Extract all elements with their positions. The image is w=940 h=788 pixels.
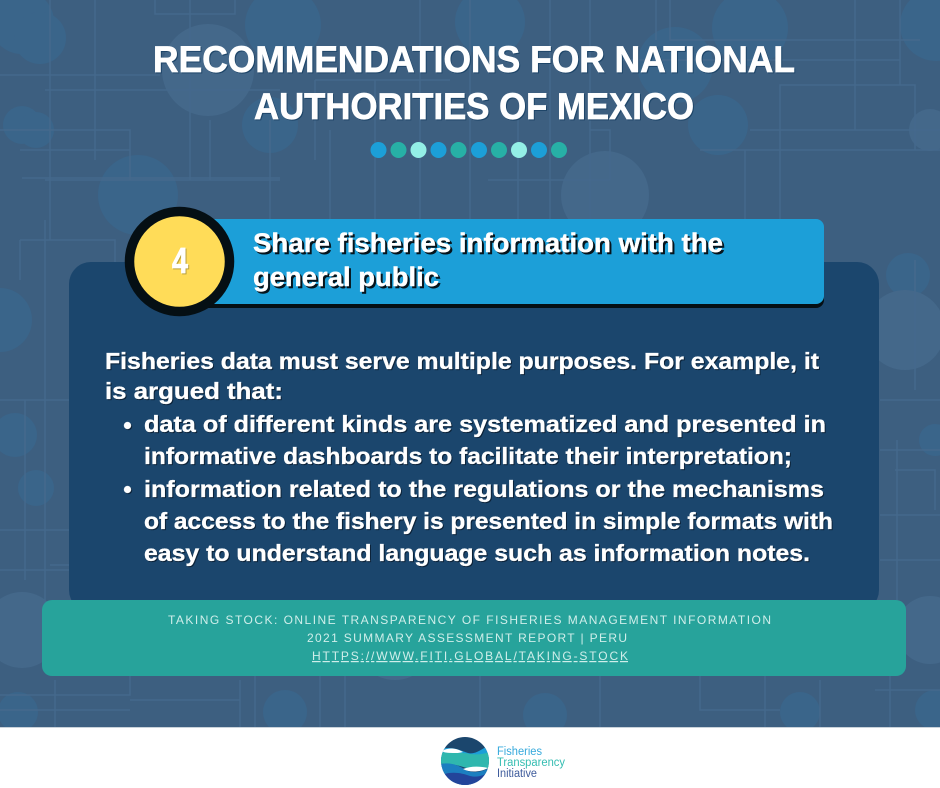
logo wordmark: Transparency — [497, 757, 565, 769]
body text — [105, 348, 833, 566]
body text: easy to understand language such as information notes. — [144, 540, 810, 566]
banner heading text — [253, 228, 723, 292]
source text: HTTPS://WWW.FITI.GLOBAL/TAKING-STOCK — [312, 649, 628, 663]
banner: recommendation heading — [200, 219, 824, 308]
logo wordmark — [497, 746, 565, 780]
logo wordmark: Fisheries — [497, 746, 542, 758]
number badge: 4 — [172, 240, 188, 281]
title: AUTHORITIES OF MEXICO — [254, 86, 694, 127]
banner heading text: general public — [253, 262, 439, 292]
source text: 2021 SUMMARY ASSESSMENT REPORT | PERU — [307, 631, 627, 645]
source text — [168, 613, 771, 663]
panel: recommendation body — [69, 262, 879, 612]
body text: is argued that: — [105, 378, 283, 404]
decorative dot row — [370, 142, 567, 158]
footer band — [0, 727, 940, 788]
body text: informative dashboards to facilitate their interpretation; — [144, 443, 792, 469]
body text: data of different kinds are systematized and presented in — [144, 411, 826, 437]
banner heading text: Share fisheries information with the — [253, 228, 723, 258]
source text: TAKING STOCK: ONLINE TRANSPARENCY OF FISHERIES MANAGEMENT INFORMATION — [168, 613, 771, 627]
body text: of access to the fishery is presented in simple formats with — [144, 508, 833, 534]
source panel — [42, 600, 906, 676]
title: RECOMMENDATIONS FOR NATIONAL — [153, 39, 795, 80]
number badge — [130, 212, 230, 312]
logo mark — [441, 737, 489, 785]
body text: information related to the regulations or the mechanisms — [144, 476, 824, 502]
logo: Fisheries Transparency Initiative — [441, 737, 565, 785]
body text: Fisheries data must serve multiple purposes. For example, it — [105, 348, 819, 374]
logo wordmark: Initiative — [497, 768, 537, 780]
title — [153, 39, 795, 127]
